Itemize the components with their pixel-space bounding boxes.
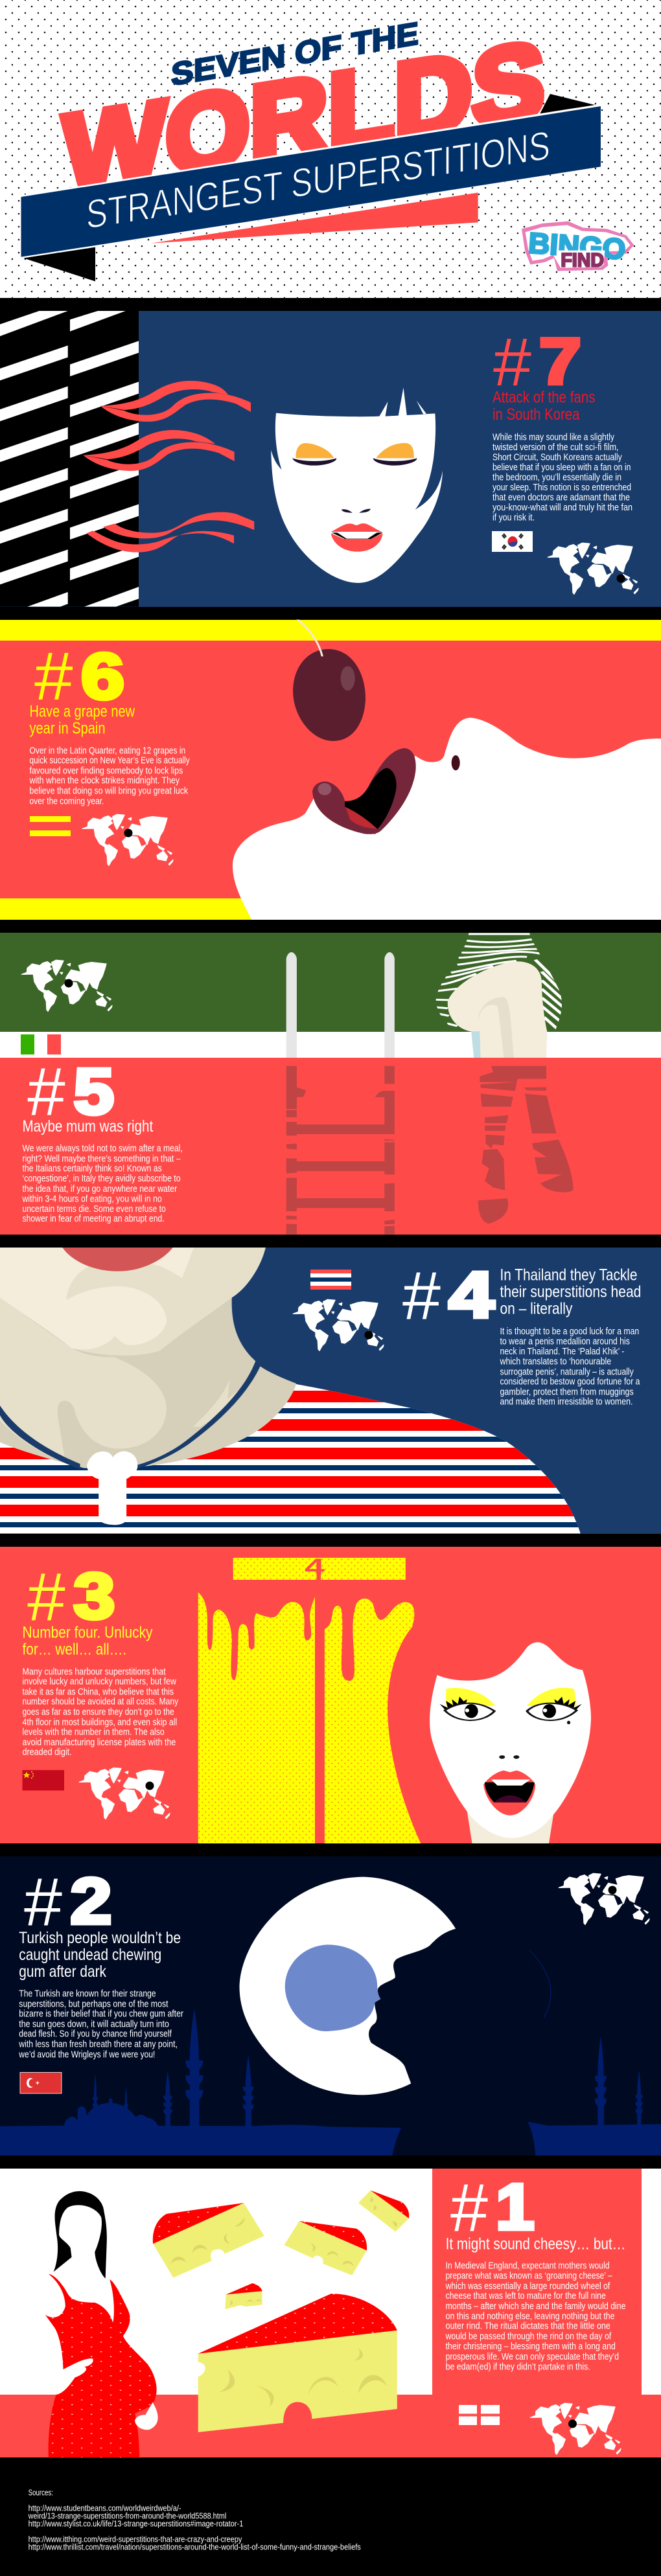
heading 3: for… well… all….: [22, 1641, 126, 1659]
world map: spain: [82, 814, 173, 865]
body text 4: neck in Thailand. The ‘Palad Khik’ -: [500, 1347, 625, 1357]
body text 2: the sun goes down, it will actually turn into: [19, 2020, 169, 2030]
number 7: #: [493, 325, 531, 400]
logo: bingo find: FIND: [561, 249, 604, 271]
number 2: [24, 1865, 111, 1941]
number 3: [27, 1560, 115, 1636]
fan wind lines: [83, 381, 254, 553]
body text 1: In Medieval England, expectant mothers would: [446, 2261, 610, 2271]
panel: number 6 spain: [0, 620, 661, 920]
body text 4: It is thought to be a good luck for a man: [500, 1327, 639, 1337]
body text 4: considered to bestow good fortune for a: [500, 1377, 640, 1387]
body text 3: goes as far as to ensure they don’t go to the: [22, 1707, 174, 1718]
flag: england: [459, 2405, 500, 2425]
body text 1: months – after which she and the family would dine: [446, 2301, 625, 2312]
body text 3: involve lucky and unlucky numbers, but few: [22, 1677, 176, 1687]
number 4: #: [402, 1259, 441, 1334]
sources footer: http://www.itthing.com/weird-superstitions-that-are-crazy-and-creepy: [29, 2535, 242, 2544]
body text 4: surrogate penis’, naturally – is actually: [500, 1367, 634, 1377]
sign: floor four: [233, 1555, 406, 1580]
heading 2: [19, 1929, 181, 1981]
number 7: 7: [539, 325, 581, 398]
body text 2: [18, 1989, 183, 2060]
body text 3: 4th floor in most buildings, and even skip all: [22, 1718, 177, 1728]
number 3: 3: [74, 1560, 115, 1632]
heading 4: [500, 1266, 641, 1318]
illustration: dripping yellow walls: [198, 1592, 421, 1843]
body text 7: if you risk it.: [493, 513, 535, 523]
title: seven of the: SEVEN OF THE: [171, 16, 419, 93]
body text 2: superstitions, but perhaps one of the most: [19, 2000, 168, 2010]
panel: number 7 south korea: [0, 311, 661, 607]
body text 2: we’d avoid the Wrigleys if we were you!: [18, 2050, 155, 2060]
body text 4: gambler, protect them from muggings: [500, 1387, 634, 1398]
illustration: skyline: [0, 2009, 661, 2156]
illustration: pool ladder: [286, 952, 395, 1058]
body text 2: bizarre is their belief that if you chew gum after: [19, 2009, 183, 2020]
number 5: 5: [74, 1056, 114, 1128]
body text 3: Many cultures harbour superstitions that: [22, 1667, 166, 1677]
body text 2: The Turkish are known for their strange: [19, 1989, 156, 2000]
body text 5: ‘congestione’, in Italy they avidly subscribe to: [22, 1174, 180, 1184]
sources footer: weird/13-strange-superstitions-from-around-the-world5588.html: [28, 2512, 226, 2521]
heading 1: It might sound cheesy… but…: [446, 2235, 625, 2253]
body text 6: [29, 746, 190, 807]
heading 2: Turkish people wouldn’t be: [19, 1929, 181, 1947]
flag: thailand: [310, 1270, 351, 1290]
icon: medallion: [87, 1451, 137, 1525]
body text 7: twisted version of the cult sci-fi film,: [493, 442, 618, 453]
logo: bingo find: [522, 222, 634, 271]
illustration: sleeping face: [271, 387, 443, 583]
body text 1: prepare what was known as ‘groaning cheese’ –: [446, 2271, 612, 2281]
body text 5: within 3-4 hours of eating, you will in no: [22, 1194, 162, 1204]
sources footer: Sources:: [29, 2488, 53, 2497]
heading 3: Number four. Unlucky: [22, 1624, 153, 1642]
logo: bingo find: BINGO: [528, 226, 627, 266]
body text 5: [22, 1143, 183, 1224]
body text 5: We were always told not to swim after a meal,: [22, 1143, 183, 1154]
body text 7: the bedroom, you’ll essentially die in: [493, 473, 621, 483]
body text 3: levels with the number in them. The also: [22, 1727, 165, 1738]
body text 5: shower in fear of meeting an abrupt end.: [22, 1214, 165, 1224]
body text 7: While this may sound like a slightly: [493, 432, 615, 442]
heading 6: [30, 703, 135, 738]
body text 1: which was essentially a large rounded wheel of: [445, 2281, 610, 2292]
heading 6: year in Spain: [30, 720, 105, 738]
body text 1: cheese that was left to mature for the full nine: [446, 2291, 606, 2301]
heading 3: [22, 1624, 153, 1659]
illustration: grape and mouth: [233, 620, 661, 920]
body text 5: uncertain terms die. Some even refuse to: [22, 1204, 166, 1214]
flag: turkey: [20, 2073, 62, 2093]
number 1: #: [450, 2171, 488, 2246]
body text 7: [493, 432, 632, 523]
number 1: [450, 2171, 534, 2246]
heading 7: [493, 389, 595, 424]
number 5: #: [27, 1054, 65, 1130]
body text 5: the Italians certainly think so! Known as: [22, 1164, 162, 1174]
illustration: surprised woman: [430, 1642, 591, 1843]
panel: number 5 italy: [0, 933, 661, 1235]
number 6: #: [34, 639, 73, 714]
illustration: moon and silhouette: [239, 1877, 551, 2095]
body text 6: favoured over finding somebody to lock lips: [30, 766, 183, 776]
title: strangest superstitions: STRANGEST SUPERSTITIONS: [86, 123, 550, 238]
body text 7: your sleep. This notion is so entrenched: [493, 483, 631, 493]
body text 6: over the coming year.: [30, 797, 104, 807]
body text 7: Short Circuit, South Koreans actually: [493, 452, 622, 462]
body text 1: outer rind. The ritual dictates that the little one: [446, 2321, 610, 2332]
body text 1: be edam(ed) if they didn’t partake in this.: [446, 2362, 590, 2372]
heading 5: Maybe mum was right: [22, 1117, 153, 1135]
heading 2: caught undead chewing: [19, 1946, 161, 1964]
sources footer: [28, 2488, 361, 2552]
body text 3: avoid manufacturing license plates with the: [22, 1738, 176, 1748]
body text 1: [445, 2261, 625, 2372]
sources footer: http://www.stylist.co.uk/life/13-strange-superstitions#image-rotator-1: [29, 2520, 243, 2529]
number 4: 4: [448, 1259, 494, 1332]
illustration: neck and chin: [0, 1248, 296, 1469]
heading 2: gum after dark: [19, 1963, 106, 1981]
body text 5: the idea that, if you go anywhere near water: [22, 1184, 177, 1194]
illustration: striped shirt: [0, 1384, 581, 1534]
body text 7: that even doctors are adamant that the: [493, 493, 630, 503]
world map: china: [79, 1768, 170, 1819]
illustration: flying cheese pieces: [153, 2191, 409, 2309]
illustration: leg and swimsuit: [435, 933, 565, 1058]
sources footer: http://www.thrillist.com/travel/nation/superstitions-around-the-world-list-of-some-funny-and-strange-beliefs: [29, 2543, 361, 2552]
panel: number 4 thailand: [0, 1248, 661, 1534]
number 2: #: [24, 1865, 62, 1941]
body text 4: which translates to ‘honourable: [500, 1357, 611, 1367]
number 6: [34, 639, 124, 714]
illustration: pregnant woman: [45, 2191, 158, 2457]
flag: italy: [21, 1034, 61, 1054]
sources footer: http://www.studentbeans.com/worldweirdweb/a/-: [29, 2504, 181, 2513]
panel: number 2 turkey: [0, 1856, 661, 2156]
heading 4: In Thailand they Tackle: [500, 1266, 638, 1284]
body text 6: Over in the Latin Quarter, eating 12 grapes in: [30, 746, 185, 756]
flag: china: [22, 1770, 64, 1790]
ribbon banner: [21, 94, 601, 281]
number 4: [402, 1259, 494, 1334]
body text 3: take it as far as China, who believe that this: [22, 1687, 174, 1698]
body text 4: to wear a penis medallion around his: [500, 1337, 630, 1347]
body text 5: right? Well maybe there’s something in that –: [22, 1154, 181, 1164]
body text 7: believe that if you sleep with a fan on in: [493, 462, 631, 473]
number 5: [27, 1054, 114, 1130]
flag: spain: [30, 816, 71, 836]
number 7: [493, 325, 581, 400]
number 3: #: [27, 1560, 65, 1636]
sign: floor four: 4: [305, 1555, 325, 1580]
world map: italy: [21, 960, 112, 1011]
body text 6: believe that doing so will bring you great luck: [30, 786, 189, 797]
body text 7: you-know-what will and truly hit the fan: [493, 503, 632, 513]
diagonal black and white stripes: [0, 311, 139, 607]
heading 7: Attack of the fans: [493, 389, 595, 407]
heading 6: Have a grape new: [30, 703, 135, 721]
panel: number 1 england: [0, 2169, 661, 2457]
panel: header: [0, 0, 661, 299]
body text 4: and make them irresistible to women.: [500, 1397, 632, 1408]
body text 6: quick succession on New Year’s Eve is actually: [30, 756, 190, 766]
flag: south korea: [492, 531, 533, 552]
world map: turkey: [559, 1873, 649, 1924]
body text 1: on this and nothing else, leaving nothing but the: [446, 2311, 614, 2321]
panel: number 3 china: [0, 1547, 661, 1843]
world map: south korea: [548, 543, 638, 594]
number 2: 2: [70, 1865, 111, 1938]
heading 7: in South Korea: [493, 405, 580, 424]
body text 2: with less than fresh breath there at any point,: [18, 2040, 178, 2050]
number 1: 1: [496, 2171, 534, 2244]
body text 1: their christening – blessing them with a long and: [446, 2342, 616, 2352]
body text 1: would be passed through the rind on the day of: [445, 2331, 612, 2342]
illustration: water reflection: [286, 1066, 574, 1235]
body text 2: dead flesh. So if you by chance find yourself: [19, 2029, 172, 2040]
body text 1: prosperous life. We can only speculate that they’d: [446, 2352, 619, 2362]
body text 3: number should be avoided at all costs. Many: [22, 1697, 179, 1707]
world map: england: [530, 2403, 621, 2454]
heading 4: on – literally: [500, 1300, 573, 1318]
body text 4: [500, 1327, 640, 1408]
number 6: 6: [81, 640, 124, 712]
title: worlds: WORLDS: [64, 18, 544, 215]
body text 6: with when the clock strikes midnight. They: [29, 776, 180, 786]
body text 3: dreaded digit.: [22, 1748, 72, 1758]
illustration: big cheese: [198, 2294, 397, 2432]
body text 3: [22, 1667, 179, 1758]
world map: thailand: [293, 1299, 384, 1351]
